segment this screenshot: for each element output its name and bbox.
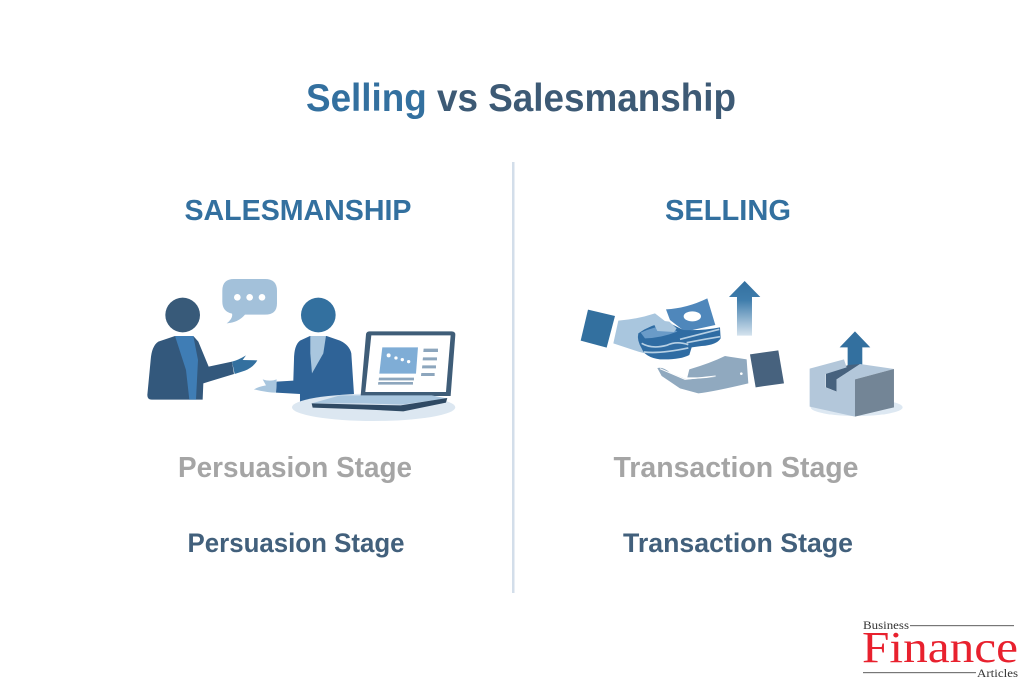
laptop: [292, 331, 455, 421]
up arrow: gradient: [729, 281, 760, 336]
speech bubble: [222, 279, 277, 323]
logo: Business Finance Articles: Business: [863, 620, 910, 632]
person left: [147, 298, 257, 400]
title: Selling vs Salesmanship: [306, 77, 736, 120]
box with arrow: [810, 331, 903, 417]
label: persuasion grey: Persuasion Stage: [178, 452, 412, 484]
illustration: salesperson and client at laptop: [147, 279, 455, 421]
giving hand: [581, 310, 670, 357]
heading: salesmanship: SALESMANSHIP: [184, 195, 412, 227]
label: persuasion dark: Persuasion Stage: [188, 528, 404, 558]
person right: [254, 298, 354, 403]
logo: Business Finance Articles: Finance: [862, 623, 1018, 672]
center divider: [512, 162, 514, 593]
heading: selling: SELLING: [665, 195, 791, 227]
logo: Business Finance Articles: Articles: [977, 668, 1019, 680]
receiving hand: [657, 350, 784, 393]
label: transaction grey: Transaction Stage: [614, 452, 858, 484]
illustration: money exchange and box: [581, 281, 903, 417]
label: transaction dark: Transaction Stage: [623, 528, 853, 558]
money stack: [638, 298, 721, 359]
